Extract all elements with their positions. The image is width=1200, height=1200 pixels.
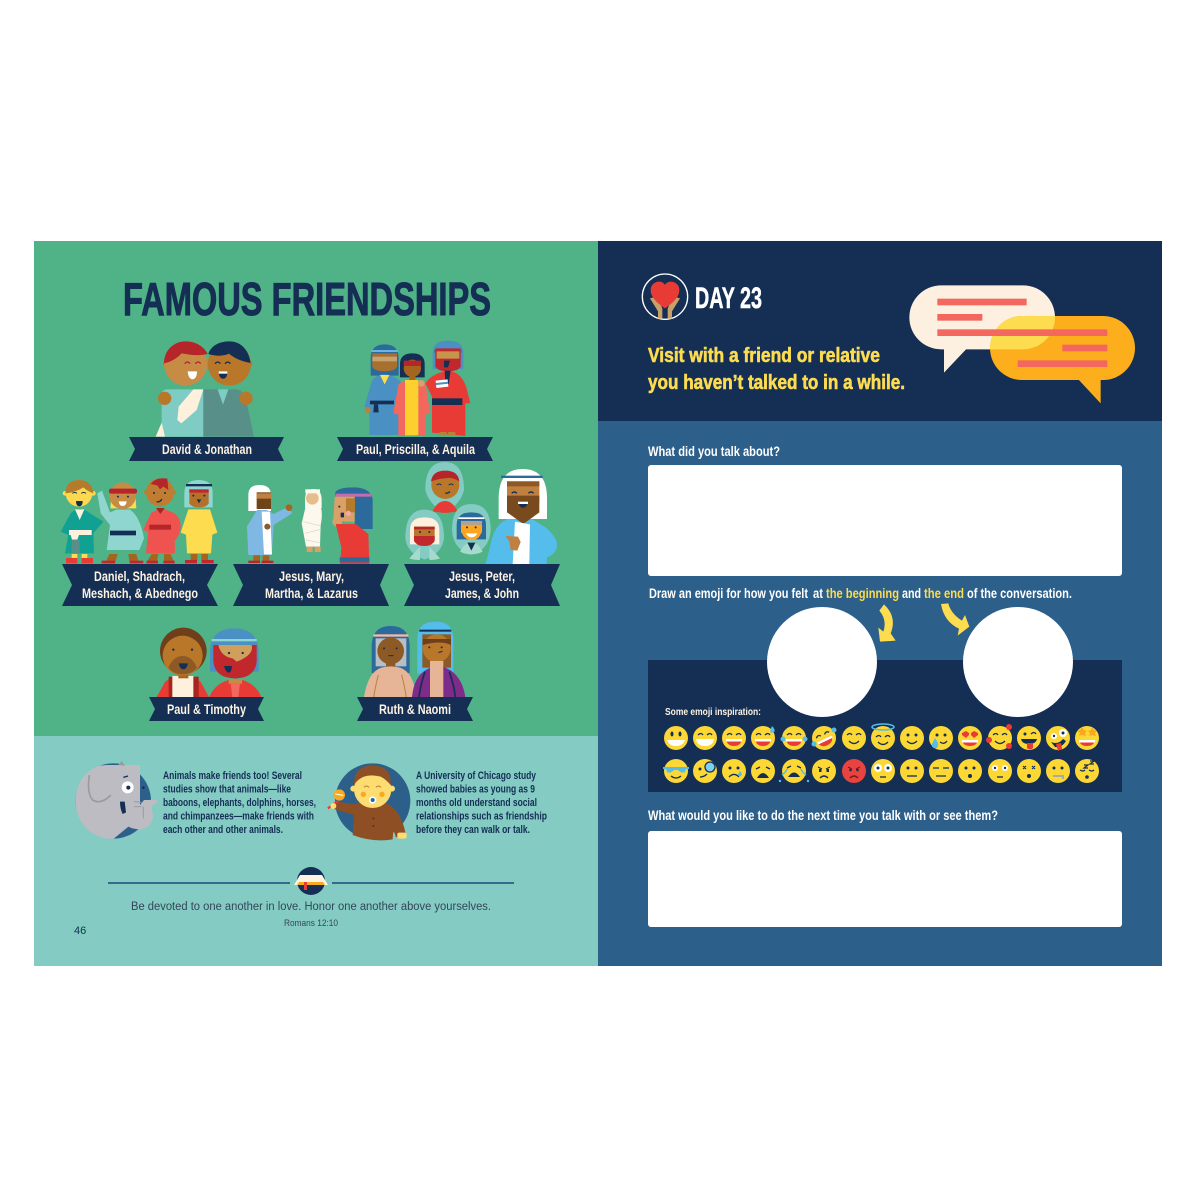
answer box 1 <box>648 465 1122 576</box>
text: university of chicago study <box>416 770 547 836</box>
icon: open bible <box>294 867 328 895</box>
banner: Paul & Timothy: Paul & Timothy <box>167 702 246 717</box>
circle: beginning emoji <box>767 607 877 717</box>
text: animals make friends: baboons, elephants, dolphins, horses, <box>163 797 316 809</box>
emoji row 1 <box>664 724 1099 751</box>
instruction: draw an emoji: and <box>902 586 921 601</box>
banner: Paul, Priscilla, & Aquila: Paul, Priscilla, & Aquila <box>356 442 475 457</box>
banner: Ruth & Naomi: Ruth & Naomi <box>379 702 451 717</box>
text: university of chicago study: A University of Chicago study <box>416 770 537 782</box>
illustration: Paul, Priscilla and Aquila <box>364 341 470 436</box>
question: what did you talk about: What did you talk about? <box>648 444 780 459</box>
instruction: draw an emoji: at <box>813 586 823 601</box>
challenge text: you haven’t talked to in a while. <box>648 372 905 394</box>
emoji row 2 <box>663 759 1099 783</box>
text: animals make friends <box>163 770 316 836</box>
arrow: to end circle <box>941 603 969 636</box>
banner: David & Jonathan <box>129 437 284 461</box>
banner: Paul, Priscilla, & Aquila <box>337 437 493 461</box>
banner: Daniel, Shadrach, Meshach, & Abednego: Daniel, Shadrach, <box>94 569 185 584</box>
panel: day 23 header <box>598 241 1162 421</box>
emoji band <box>648 660 1122 792</box>
text: university of chicago study: months old understand social <box>416 797 537 809</box>
illustration: Martha <box>332 487 373 564</box>
panel: activity <box>598 421 1162 966</box>
banner: Daniel, Shadrach, Meshach, & Abednego: Meshach, & Abednego <box>82 586 198 601</box>
question: next time: What would you like to do the next time you talk with or see them? <box>648 808 998 823</box>
banner: David & Jonathan: David & Jonathan <box>162 442 252 457</box>
text: animals make friends: each other and other animals. <box>163 824 283 836</box>
banner: Ruth & Naomi <box>357 697 473 721</box>
illustration: David and Jonathan <box>156 341 254 437</box>
text: university of chicago study: relationships such as friendship <box>416 810 547 822</box>
arrow: to beginning circle <box>878 604 896 642</box>
challenge text: Visit with a friend or relative <box>648 345 880 367</box>
text: university of chicago study: before they can walk or talk. <box>416 824 530 836</box>
circle: end emoji <box>963 607 1073 717</box>
banner: Paul & Timothy <box>149 697 264 721</box>
instruction: draw an emoji: the end <box>924 586 964 601</box>
instruction: draw an emoji: Draw an emoji for how you felt <box>649 586 808 601</box>
illustration: Daniel, Shadrach, Meshach and Abednego <box>61 478 217 563</box>
answer box 2 <box>648 831 1122 927</box>
text: animals make friends: and chimpanzees—make friends with <box>163 810 314 822</box>
banner: Jesus, Peter, James, & John: James, & John <box>445 586 519 601</box>
icon: heart in hands <box>642 274 688 319</box>
title: FAMOUS FRIENDSHIPS <box>123 273 491 325</box>
label: some emoji inspiration: Some emoji inspiration: <box>665 706 761 718</box>
illustration: Jesus, Peter, James and John <box>405 462 557 564</box>
icon: speech bubbles <box>909 285 1135 403</box>
icon: elephant <box>76 761 157 839</box>
panel: facts and verse <box>34 736 598 966</box>
instruction: draw an emoji: of the conversation. <box>967 586 1072 601</box>
illustration: Ruth and Naomi <box>364 622 465 697</box>
panel: famous friendships <box>34 241 598 736</box>
icon: baby with rattle <box>327 763 410 840</box>
verse reference: Romans 12:10 <box>284 918 338 928</box>
challenge text <box>648 345 905 394</box>
banner: Jesus, Peter, James, & John: Jesus, Peter, <box>449 569 515 584</box>
page number: 46 <box>74 925 86 937</box>
banner: Daniel, Shadrach, Meshach, & Abednego <box>62 564 218 606</box>
text: university of chicago study: showed babies as young as 9 <box>416 784 535 796</box>
verse: Be devoted to one another in love. Honor one another above yourselves. <box>131 901 491 913</box>
illustration: Jesus, Mary, Martha and Lazarus <box>247 485 322 563</box>
heading: Day 23: DAY 23 <box>695 282 762 315</box>
banner: Jesus, Peter, James, & John <box>404 564 560 606</box>
instruction: draw an emoji: the beginning <box>826 586 899 601</box>
banner: Jesus, Mary, Martha, & Lazarus: Jesus, Mary, <box>279 569 344 584</box>
text: animals make friends: studies show that animals—like <box>163 784 291 796</box>
illustration: Paul and Timothy <box>157 628 261 697</box>
banner: Jesus, Mary, Martha, & Lazarus <box>233 564 389 606</box>
banner: Jesus, Mary, Martha, & Lazarus: Martha, & Lazarus <box>265 586 358 601</box>
instruction: draw an emoji <box>649 586 1072 601</box>
text: animals make friends: Animals make friends too! Several <box>163 770 302 782</box>
